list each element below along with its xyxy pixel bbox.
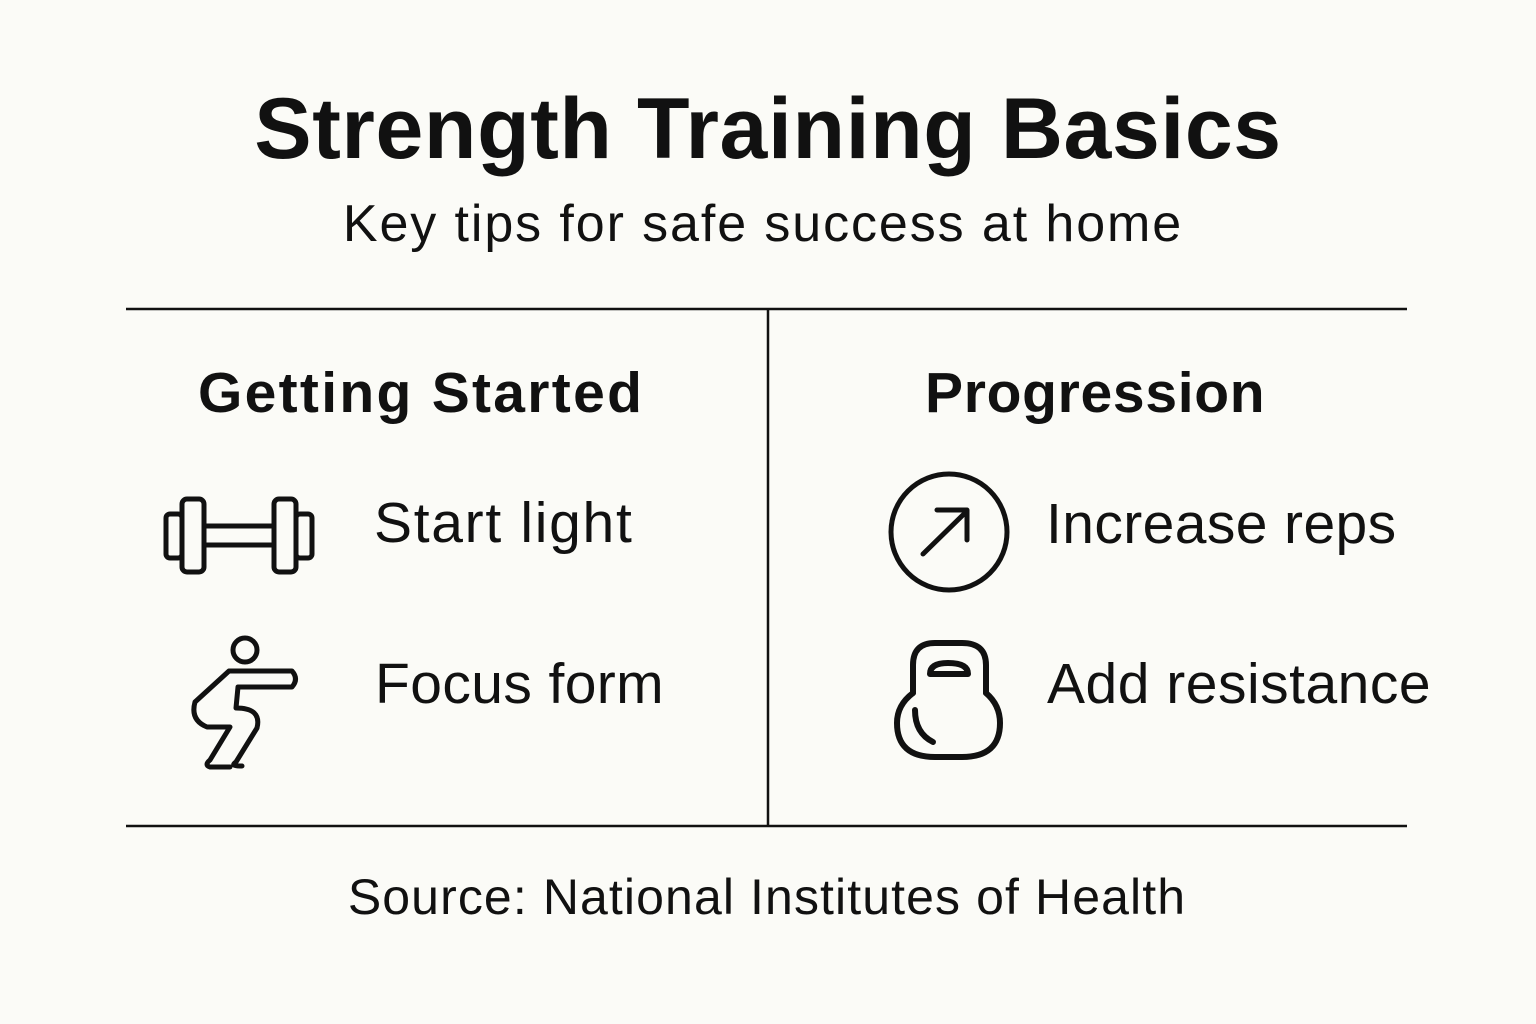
heading: getting started: Getting Started [198, 361, 644, 425]
panel: getting started [164, 361, 664, 770]
icon: dumbbell [164, 496, 314, 574]
text: increase reps: Increase reps [1046, 492, 1397, 556]
title: Strength Training Basics [254, 81, 1282, 177]
text: add resistance: Add resistance [1047, 652, 1431, 716]
heading: progression: Progression [925, 361, 1265, 425]
source: Source: National Institutes of Health [348, 869, 1186, 925]
icon: circle arrow [888, 472, 1010, 592]
icon: kettlebell [894, 640, 1003, 760]
icon: squat figure [191, 636, 298, 770]
panel: progression [888, 361, 1431, 760]
subtitle: Key tips for safe success at home [343, 195, 1183, 253]
text: focus form: Focus form [375, 652, 664, 716]
text: start light: Start light [374, 491, 633, 555]
